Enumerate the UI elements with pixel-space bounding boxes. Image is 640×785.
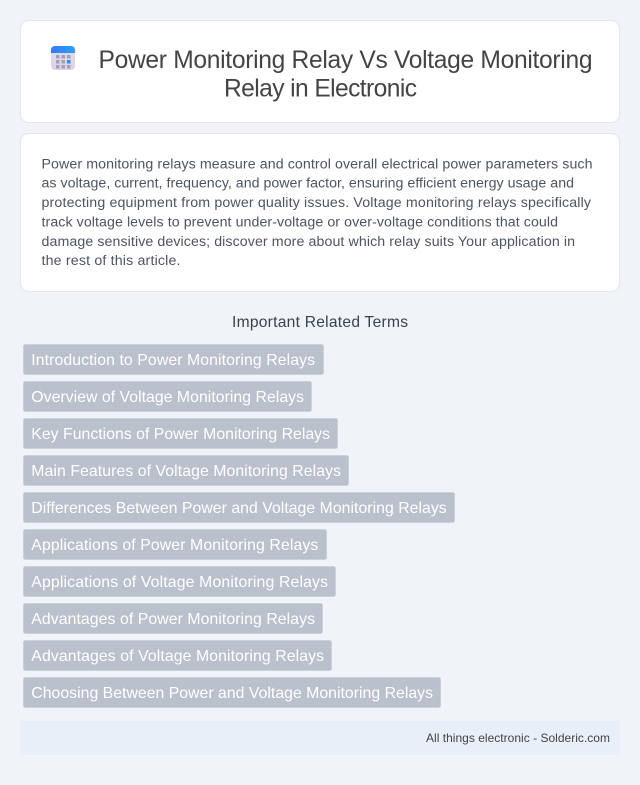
text block: description: protecting equipment from power quality issues. Voltage monitoring relays specifically <box>42 195 592 211</box>
tag: applications power: Applications of Power Monitoring Relays <box>31 537 318 554</box>
panel: description card <box>20 134 620 292</box>
tag: key functions: Key Functions of Power Monitoring Relays <box>31 426 330 443</box>
text block: description: damage sensitive devices; discover more about which relay suits Your application in <box>42 234 575 250</box>
tag: advantages power: Advantages of Power Monitoring Relays <box>31 611 315 628</box>
text block: description: the rest of this article. <box>42 253 180 269</box>
tag: advantages voltage: Advantages of Voltage Monitoring Relays <box>31 648 324 665</box>
panel: related terms list <box>24 344 454 708</box>
tag: choosing: Choosing Between Power and Voltage Monitoring Relays <box>31 685 433 702</box>
tag: applications voltage: Applications of Voltage Monitoring Relays <box>31 574 328 591</box>
title <box>98 47 592 102</box>
footer <box>20 721 620 755</box>
footer: All things electronic - Solderic.com <box>426 731 610 745</box>
tag: key functions <box>24 418 338 448</box>
tag: overview: Overview of Voltage Monitoring Relays <box>31 389 304 406</box>
panel: header card <box>20 20 620 122</box>
tag: applications voltage <box>24 566 336 596</box>
heading: important related terms: Important Related Terms <box>232 314 408 331</box>
icon: calendar <box>51 46 75 70</box>
text block: description <box>42 156 592 269</box>
tag: advantages voltage <box>24 640 332 670</box>
title: Relay in Electronic <box>224 76 417 102</box>
tag: main features <box>24 456 348 486</box>
tag: differences: Differences Between Power and Voltage Monitoring Relays <box>31 500 447 517</box>
tag: introduction: Introduction to Power Monitoring Relays <box>31 352 315 369</box>
tag: choosing <box>24 678 440 708</box>
tag: main features: Main Features of Voltage Monitoring Relays <box>31 463 341 480</box>
tag: applications power <box>24 530 326 560</box>
tag: overview <box>24 382 312 412</box>
tag: advantages power <box>24 604 322 634</box>
title: Power Monitoring Relay Vs Voltage Monitoring <box>98 47 592 74</box>
tag: introduction <box>24 344 324 374</box>
text block: description: track voltage levels to prevent under-voltage or over-voltage conditions that could <box>42 214 558 230</box>
tag: differences <box>24 492 454 522</box>
text block: description: Power monitoring relays measure and control overall electrical power parameters such <box>42 156 592 172</box>
text block: description: as voltage, current, frequency, and power factor, ensuring efficient energy usage and <box>42 176 574 192</box>
